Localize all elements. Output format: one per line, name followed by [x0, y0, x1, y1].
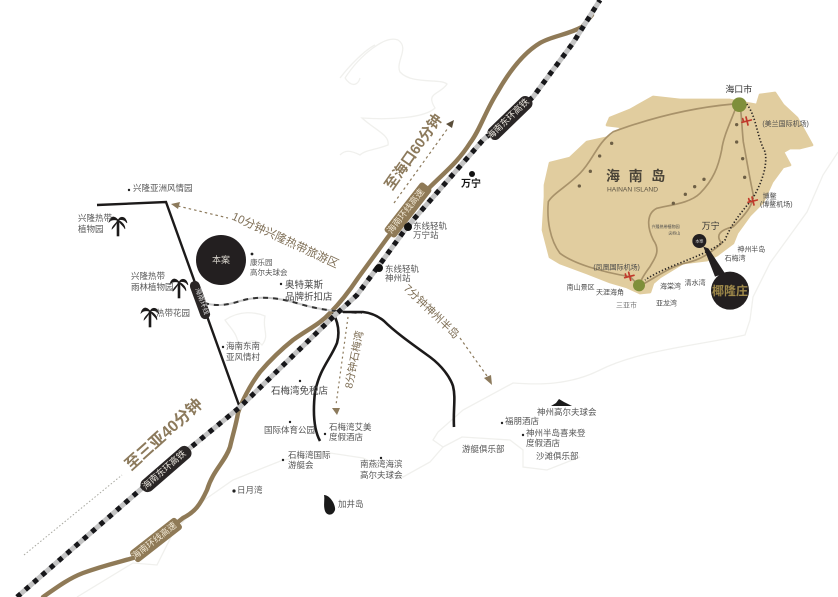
- marker: project site: 本案: [212, 254, 230, 265]
- label: 7 minutes to Shenzhou: 7分钟神州半岛: [401, 281, 463, 341]
- island labels: 清水湾: [685, 278, 706, 287]
- badge: expressway on black line: 海南环线: [193, 286, 211, 316]
- island labels: 天涯海角: [596, 288, 624, 297]
- dotted line: southwest route: [24, 475, 122, 555]
- map labels: Shimei Bay area: 高尔夫球会: [360, 470, 403, 480]
- island labels: 神州半岛: [737, 244, 765, 253]
- map labels: Shenzhou Peninsula: 度假酒店: [526, 438, 561, 448]
- island labels: (凤凰国际机场): [593, 262, 640, 271]
- map labels: Xinglong area: 热带花园: [156, 308, 190, 318]
- railway: Hainan East Ring high-speed rail: [17, 0, 600, 597]
- map labels: Xinglong area: 植物园: [78, 224, 104, 234]
- map labels: Shimei Bay area: 石梅湾国际: [288, 450, 331, 460]
- island title: 海南岛: [606, 168, 674, 184]
- plane icons: [625, 117, 757, 280]
- map labels: Shimei Bay area: [232, 380, 403, 515]
- island labels: 尖岭山: [668, 230, 680, 236]
- project marker: [692, 234, 706, 248]
- road: branch to Shimei Bay: [314, 313, 338, 441]
- map labels: Shenzhou Peninsula: 神州半岛喜来登: [526, 428, 586, 438]
- island labels: (博鳌机场): [760, 200, 793, 209]
- inset map: Hainan Island: [543, 84, 812, 310]
- callout pointer: [703, 247, 725, 277]
- island labels: (美兰国际机场): [762, 119, 809, 128]
- map labels: Shimei Bay area: 日月湾: [237, 485, 263, 495]
- map labels: Wanning and stations: [375, 171, 481, 283]
- map labels: Shenzhou Peninsula: 游艇俱乐部: [462, 444, 505, 454]
- map labels: Xinglong area: 康乐园: [250, 257, 272, 267]
- marker: project site: [196, 235, 246, 285]
- map labels: Xinglong area: 雨林植物园: [131, 282, 174, 292]
- island labels: [567, 84, 809, 309]
- inset map: Hainan Island: HAINAN ISLAND: [607, 186, 658, 193]
- icon: palm 2: [170, 279, 188, 298]
- map labels: Wanning and stations: 万宁站: [413, 230, 439, 240]
- map labels: Wanning and stations: 神州站: [385, 273, 411, 283]
- map labels: Shimei Bay area: 国际体育公园: [264, 425, 315, 435]
- road: Hainan ring expressway (brown): [43, 15, 592, 597]
- road: light rail dashed line: [204, 298, 362, 313]
- map labels: Shenzhou Peninsula: [462, 399, 597, 461]
- map labels: Xinglong area: 品牌折扣店: [285, 291, 333, 303]
- map labels: Xinglong area: 兴隆亚洲风情园: [133, 183, 193, 193]
- label: 60 minutes to Haikou: 至海口60分钟: [381, 110, 446, 193]
- map labels: Xinglong area: 兴隆热带: [131, 271, 166, 281]
- map labels: Wanning and stations: 万宁: [461, 177, 481, 190]
- map labels: Shimei Bay area: 加井岛: [338, 499, 364, 509]
- map labels: Xinglong area: 奥特莱斯: [285, 279, 324, 291]
- map labels: Shimei Bay area: 石梅湾免税店: [271, 385, 328, 397]
- label: 8 minutes to Shimei Bay: 8分钟石梅湾: [342, 329, 366, 390]
- arrow: to Shenzhou 7 min: [460, 338, 492, 385]
- map labels: Shenzhou Peninsula: 福朋酒店: [505, 416, 540, 426]
- badge: East Ring rail upper: 海南东环高铁: [484, 96, 531, 141]
- badge: ring expressway upper: 海南环线高速: [384, 186, 426, 236]
- map labels: Shimei Bay area: 度假酒店: [329, 432, 364, 442]
- island labels: 海棠湾: [660, 282, 681, 291]
- label: 10 minutes to Xinglong: 10分钟兴隆热带旅游区: [230, 209, 341, 271]
- map labels: Xinglong area: 高尔夫球会: [250, 267, 288, 277]
- town dots: [578, 123, 746, 205]
- island labels: 石梅湾: [725, 254, 746, 263]
- road: expressway black line: [97, 202, 240, 408]
- island labels: 兴隆热带植物园: [652, 223, 680, 229]
- island labels: 亚龙湾: [656, 298, 677, 307]
- island shape: [543, 93, 812, 293]
- map labels: Shenzhou Peninsula: 神州高尔夫球会: [537, 407, 597, 417]
- label: 40 minutes to Sanya: 至三亚40分钟: [122, 395, 206, 474]
- city markers: [732, 97, 747, 112]
- icon: palm 3: [141, 308, 159, 327]
- map labels: Shimei Bay area: 南燕湾海滨: [360, 459, 403, 469]
- map labels: Wanning and stations: 东线轻轨: [385, 264, 420, 274]
- badge: East Ring rail lower: 海南东环高铁: [140, 447, 188, 491]
- inset map: Hainan Island: 椰隆庄: [712, 283, 748, 298]
- map labels: Shimei Bay area: 石梅湾艾美: [329, 422, 372, 432]
- island labels: 海口市: [725, 84, 752, 95]
- badge: expressway on black line: [188, 279, 212, 321]
- palm icons: [109, 217, 188, 327]
- island labels: 博鳌: [763, 191, 777, 200]
- icon: palm 1: [109, 217, 127, 236]
- callout: Yelong Villa: [711, 272, 749, 310]
- arrow: to Haikou 60 min: [394, 120, 454, 203]
- map labels: Xinglong area: [78, 183, 333, 362]
- map labels: Shimei Bay area: 游艇会: [288, 460, 314, 470]
- map labels: Wanning and stations: 东线轻轨: [413, 221, 448, 231]
- map labels: Xinglong area: 亚风情村: [226, 352, 261, 362]
- island labels: 万宁: [702, 220, 720, 231]
- map labels: Xinglong area: 海南东南: [226, 341, 260, 351]
- arrow: to Shimei Bay 8 min: [332, 317, 348, 415]
- badge: ring expressway lower: 海南环线高速: [129, 519, 179, 561]
- island roads: [548, 104, 753, 285]
- map labels: Shenzhou Peninsula: 沙滩俱乐部: [536, 451, 579, 461]
- island labels: 三亚市: [616, 300, 637, 309]
- dotted rail route: [645, 104, 766, 280]
- arrow: to Xinglong 10 min: [171, 202, 228, 218]
- road: branch to Shenzhou Peninsula: [343, 312, 454, 427]
- inset map: Hainan Island: 本案: [695, 238, 703, 244]
- map labels: Xinglong area: 兴隆热带: [78, 213, 113, 223]
- island labels: 南山景区: [567, 282, 595, 291]
